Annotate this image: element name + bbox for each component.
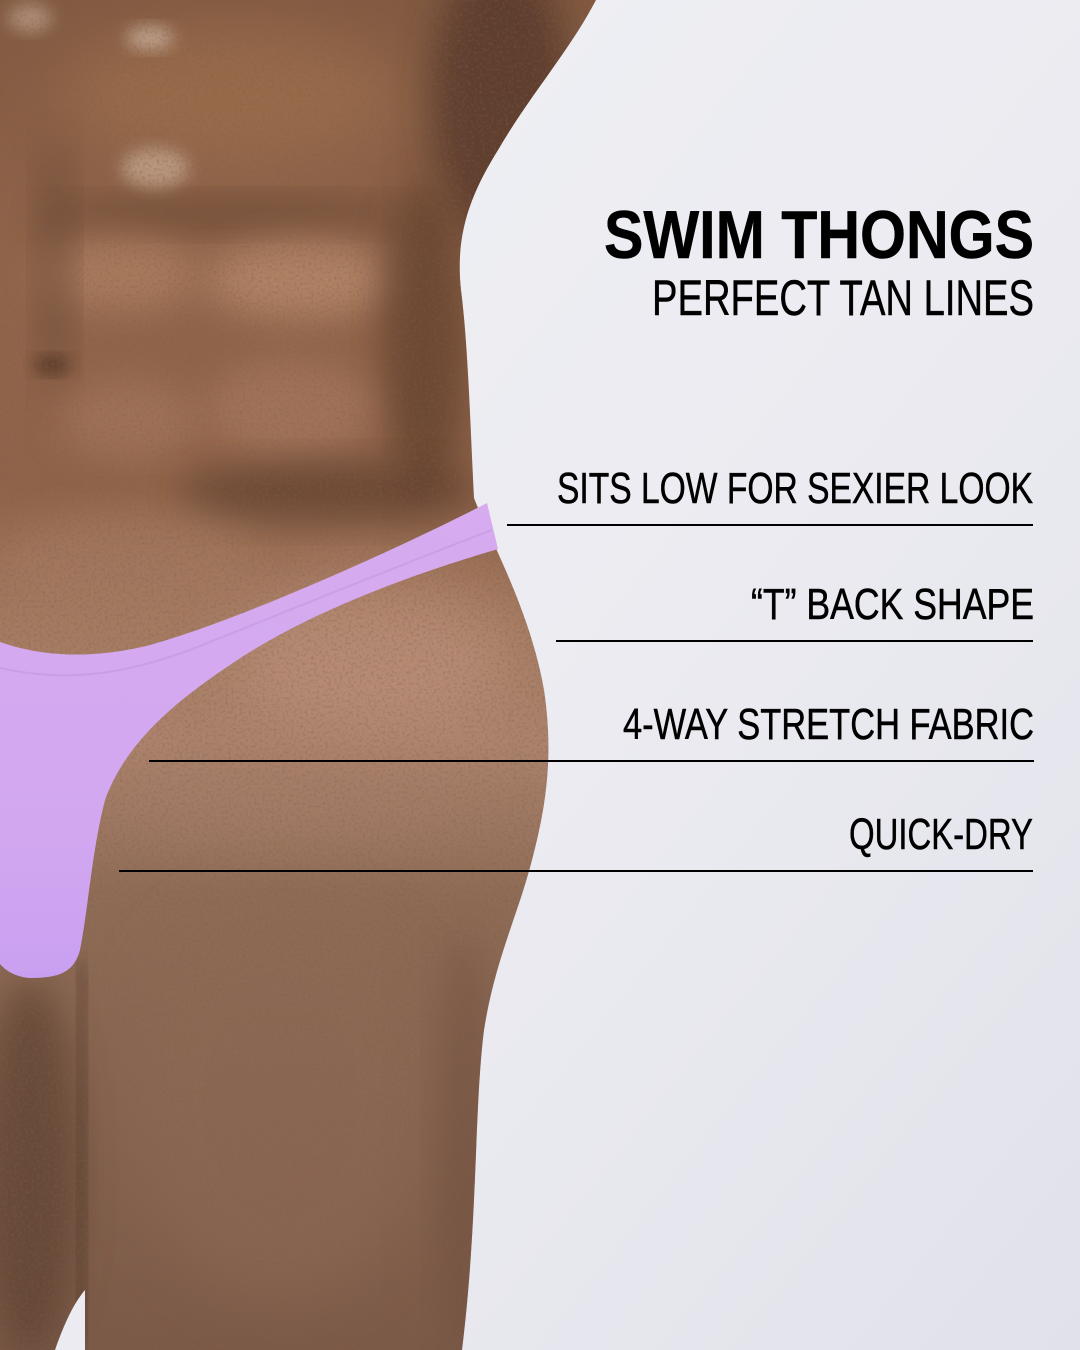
torso shading and highlights bbox=[2, 0, 577, 556]
skin texture bbox=[0, 0, 584, 1304]
hip and thigh shading bbox=[0, 580, 510, 1350]
swim thong garment bbox=[0, 503, 498, 978]
waistband seam bbox=[0, 530, 492, 675]
figure: torso and legs bbox=[0, 0, 596, 1350]
